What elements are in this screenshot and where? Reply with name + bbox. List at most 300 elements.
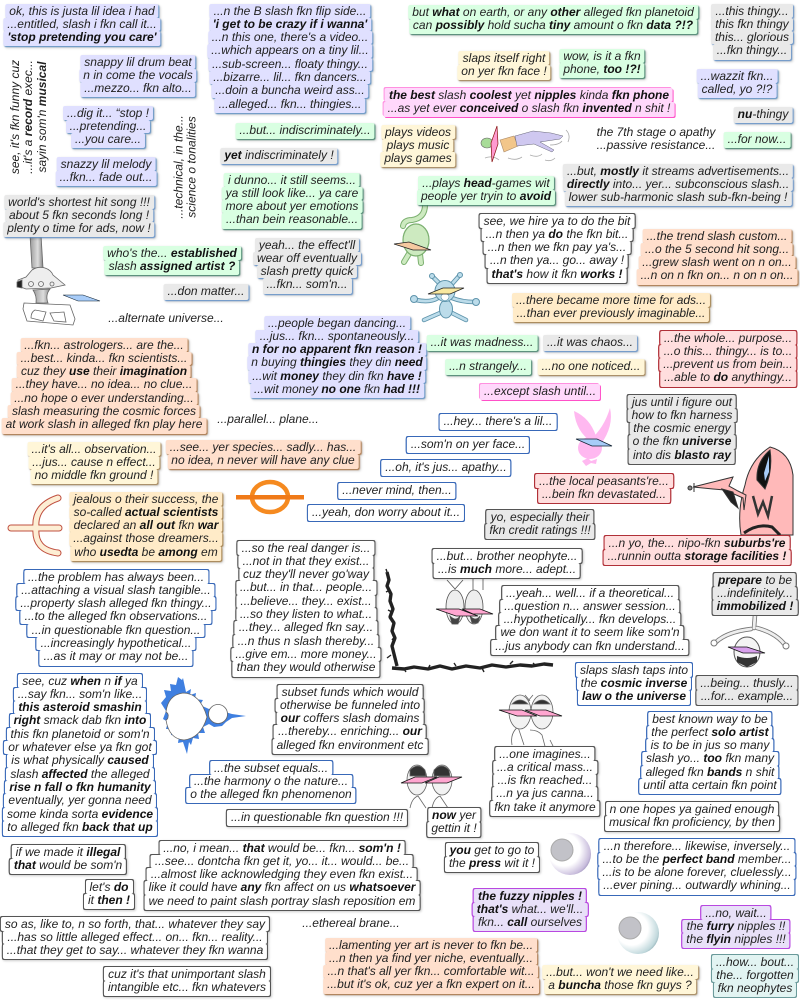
callout: credit ratings: fkn credit ratings !!! bbox=[489, 523, 591, 537]
callout: theoretical: we don want it to seem like som'n bbox=[500, 625, 680, 639]
callout: cosmic inverse law: law o the universe bbox=[582, 689, 686, 703]
rotated text: record exec: ...it's a record exec... bbox=[21, 60, 35, 174]
callout: neophytes: the... forgotten bbox=[716, 968, 794, 982]
callout: subset equals: o the alleged fkn phenomenon bbox=[190, 787, 352, 801]
icon: blue alien bbox=[410, 272, 480, 320]
callout: no i mean: we need to paint slash portray slash reposition em bbox=[149, 894, 415, 908]
callout: i dunno: more about yer emotions bbox=[226, 199, 358, 213]
rotated text: tonalities: science o tonalities bbox=[185, 116, 199, 218]
callout: furry nipples: the flyin nipples !!! bbox=[686, 932, 786, 946]
callout: now yer gettin it bbox=[426, 807, 484, 840]
callout: flip side bbox=[207, 4, 376, 116]
callout: being thusly: ...for... example... bbox=[701, 689, 793, 703]
icon: mandelbrot fractal bbox=[161, 677, 246, 754]
callout: observation: ...it's all... observation... bbox=[31, 442, 157, 456]
callout: hire ya bbox=[480, 214, 634, 283]
callout: whole purpose: ...prevent us from bein... bbox=[663, 357, 793, 371]
callout: best phone: the best slash coolest yet nipples kinda fkn phone bbox=[389, 88, 669, 102]
callout: subset equals bbox=[185, 760, 356, 804]
callout: flip side: ...n this one, there's a video... bbox=[212, 30, 368, 44]
callout: asteroid: ...say fkn... som'n like... bbox=[18, 687, 142, 701]
callout: lamenting bbox=[323, 938, 542, 997]
callout: asteroid: to alleged fkn back that up bbox=[7, 820, 153, 834]
callout: people began dancing: n for no apparent fkn reason ! bbox=[252, 342, 422, 356]
callout: except slash until: ...except slash until... bbox=[484, 384, 596, 398]
callout: asteroid bbox=[2, 673, 158, 837]
callout: flip side: ...which appears on a tiny lil... bbox=[211, 43, 369, 57]
callout: storage facilities: ...n yo, the... nipo-fkn suburbs're bbox=[609, 536, 785, 550]
callout: blasto ray: into dis blasto ray bbox=[633, 448, 731, 462]
callout: effect wear off: wear off eventually bbox=[257, 251, 357, 265]
callout: stop pretending idea: 'stop pretending you care' bbox=[7, 30, 157, 44]
callout: whole purpose: ...able to do anythingy... bbox=[664, 370, 792, 384]
callout: furry nipples: the furry nipples !! bbox=[687, 919, 785, 933]
callout: astrologers: ...no hope o ever understanding... bbox=[14, 391, 194, 405]
callout: i dunno: ya still look like... ya care bbox=[226, 186, 358, 200]
callout: real danger: than they would otherwise bbox=[237, 660, 375, 674]
callout: lets do it: let's do bbox=[90, 880, 128, 894]
callout: trend: ...o the 5 second hit song... bbox=[645, 242, 789, 256]
callout: this thingy: ...this thingy... bbox=[715, 4, 789, 18]
callout: people began dancing: ...jus... fkn... spontaneously... bbox=[260, 329, 414, 343]
callout: yet indiscriminately: yet indiscriminately ! bbox=[224, 148, 334, 162]
callout: furry nipples: ...no, wait... bbox=[705, 906, 767, 920]
callout: assigned artist: slash assigned artist ? bbox=[109, 259, 235, 273]
rotated text: record exec: see, it's fkn funny cuz bbox=[8, 60, 22, 174]
callout: melody bbox=[56, 156, 160, 189]
callout: illegal: if we made it illegal bbox=[16, 844, 120, 858]
icon: pink hooded figure with blaster bbox=[688, 447, 793, 535]
callout: asteroid: right smack dab fkn into bbox=[14, 713, 146, 727]
callout: no i mean bbox=[144, 840, 423, 913]
callout: theoretical: ...yeah... well... if a theoretical... bbox=[506, 586, 674, 600]
callout: nu-thingy: nu-thingy bbox=[738, 106, 788, 120]
icon: green alien bbox=[394, 205, 431, 263]
callout: no one noticed: ...no one noticed... bbox=[542, 358, 640, 372]
callout: advertisements bbox=[563, 164, 793, 206]
callout: stop pretending idea: ok, this is justa lil idea i had bbox=[9, 4, 155, 18]
callout: i dunno: ...than bein reasonable... bbox=[226, 212, 358, 226]
callout: flip side: ...doin a buncha weird ass... bbox=[215, 83, 365, 97]
callout: advertisements: lower sub-harmonic slash sub-fkn-being ! bbox=[569, 190, 787, 204]
callout: dig it bbox=[63, 106, 156, 151]
callout: lamenting: ...lamenting yer art is never to fkn be... bbox=[329, 938, 533, 952]
callout: neophytes bbox=[712, 954, 798, 997]
callout: best phone bbox=[384, 88, 674, 117]
callout: whole purpose: ...o this... thingy... is to... bbox=[664, 344, 792, 358]
callout: more time for ads: ...than ever previously imaginable... bbox=[517, 306, 705, 320]
callout: whole purpose bbox=[659, 330, 797, 387]
callout: asteroid: this fkn planetoid or som'n bbox=[10, 727, 150, 741]
callout: hire ya: ...n then ya do the fkn bit... bbox=[486, 227, 628, 241]
callout: no i mean: like it could have any fkn affect on us whatsoever bbox=[149, 880, 415, 894]
callout: tiny data: but what on earth, or any other alleged fkn planetoid bbox=[412, 4, 694, 18]
callout: assigned artist: who's the... established bbox=[107, 246, 237, 260]
callout: on yer face: ...som'n on yer face... bbox=[411, 436, 525, 450]
callout: don worry: ...yeah, don worry about it... bbox=[312, 504, 460, 518]
callout: shortest hit song: world's shortest hit song !!! bbox=[8, 194, 150, 208]
callout: apathy: ...oh, it's jus... apathy... bbox=[385, 460, 507, 474]
callout: astrologers: ...they have... no idea... no clue... bbox=[16, 377, 192, 391]
label: alternate universe: ...alternate universe... bbox=[108, 311, 224, 325]
callout: being thusly bbox=[696, 676, 798, 705]
callout: blasto ray: o the fkn universe bbox=[633, 434, 731, 448]
callout: one imagines: ...n ya jus canna... bbox=[496, 786, 594, 800]
callout: subset funds: alleged fkn environment etc bbox=[277, 738, 423, 752]
callout: lamenting: ...but it's ok, cuz yer a fkn expert on it... bbox=[327, 977, 535, 991]
callout: this thingy: this fkn thingy bbox=[715, 17, 789, 31]
callout: observation: ...jus... cause n effect... bbox=[32, 455, 156, 469]
callout: head games: ...plays head-games wit bbox=[422, 176, 550, 190]
callout: real danger: ...believe... they... exist... bbox=[240, 594, 372, 608]
callout: whole purpose: ...the whole... purpose... bbox=[664, 330, 792, 344]
callout: neophytes: fkn neophytes bbox=[718, 981, 792, 995]
callout: lamenting: ...n then ya find yer niche, eventually... bbox=[329, 951, 533, 965]
label: 7th stage of apathy: the 7th stage o apathy bbox=[597, 125, 715, 139]
callout: astrologers: cuz they use their imagination bbox=[21, 364, 187, 378]
callout: shortest hit song bbox=[3, 194, 158, 240]
callout: drum beat: snappy lil drum beat bbox=[84, 54, 192, 68]
callout: prepare immobilized: ...indefinitely... bbox=[717, 586, 793, 600]
callout: perfect band: ...n therefore... likewise, inversely... bbox=[604, 838, 790, 852]
callout: wazzit: called, yo ?!? bbox=[702, 82, 772, 96]
callout: yer species bbox=[166, 440, 364, 472]
callout: theoretical: ...hypothetically... fkn develops... bbox=[504, 612, 676, 626]
icon: thorny corner bbox=[386, 569, 553, 672]
callout: drum beat bbox=[79, 54, 200, 100]
callout: prepare immobilized bbox=[713, 572, 797, 615]
callout: cosmic inverse law: slaps slash taps into bbox=[580, 662, 688, 676]
label: 7th stage of apathy: ...passive resistance... bbox=[597, 138, 715, 152]
callout: fuzzy nipples: the fuzzy nipples ! bbox=[478, 888, 582, 902]
callout: advertisements: ...but, mostly it streams advertisements... bbox=[567, 164, 789, 178]
callout: subset equals: ...the harmony o the nature... bbox=[194, 774, 348, 788]
callout: proficiency bbox=[604, 801, 782, 834]
icon: orange ring bbox=[236, 482, 304, 512]
callout: brother neophyte: ...but... brother neophyte... bbox=[437, 548, 577, 562]
callout: jealous scientists: jealous o their success, the bbox=[74, 492, 218, 506]
callout: head games bbox=[417, 176, 555, 205]
callout: one imagines: ...is fkn reached... bbox=[498, 773, 592, 787]
callout: asteroid: see, cuz when n if ya bbox=[22, 674, 138, 688]
callout: wow phone: wow, is it a fkn bbox=[563, 48, 641, 62]
callout: unimportant bbox=[102, 966, 273, 999]
callout: for now: ...for now... bbox=[728, 132, 786, 146]
callout: subset funds: ...thereby... enriching... our bbox=[278, 724, 422, 738]
callout: illegal bbox=[8, 844, 129, 877]
callout: effect wear off: yeah... the effect'll bbox=[259, 238, 355, 252]
callout: astrologers: slash measuring the cosmic forces bbox=[12, 404, 196, 418]
callout: brother neophyte bbox=[433, 548, 581, 578]
callout: more time for ads bbox=[512, 292, 710, 322]
icon: twin aliens with pink visors bbox=[499, 695, 562, 750]
icon: teal eye sphere bbox=[617, 912, 659, 954]
callout: no i mean: ...see... dontcha fkn get it, yo... it... would... be... bbox=[155, 854, 409, 868]
rotated text: tonalities: ...technical, in the... bbox=[172, 115, 186, 219]
callout: madness: ...it was madness... bbox=[431, 334, 533, 348]
callout: asteroid: this asteroid smashin bbox=[18, 700, 142, 714]
callout: drum beat: n in come the vocals bbox=[83, 68, 193, 82]
callout: flip side: 'i get to be crazy if i wanna' bbox=[213, 17, 367, 31]
callout: prepare immobilized: prepare to be bbox=[718, 572, 792, 586]
callout: furry nipples bbox=[681, 905, 790, 949]
callout: theoretical bbox=[491, 586, 689, 655]
callout: theres a lil: ...hey... there's a lil... bbox=[444, 414, 552, 428]
callout: the problem: ...as it may or may not be... bbox=[44, 649, 188, 663]
callout: cosmic inverse law bbox=[576, 662, 692, 705]
callout: lamenting: ...n that's all yer fkn... comfortable wit... bbox=[327, 964, 535, 978]
callout: credit ratings: yo, especially their bbox=[491, 510, 589, 524]
callout: dig it: ...pretending... bbox=[70, 119, 146, 133]
rotated text: tonalities bbox=[172, 115, 199, 219]
callout: people began dancing: ...wit money no one fkn had !!! bbox=[254, 382, 420, 396]
callout: lets do it bbox=[82, 879, 137, 912]
callout: yer species: no idea, n never will have any clue bbox=[171, 453, 355, 467]
callout: the problem: ...to the alleged fkn observations... bbox=[25, 609, 207, 623]
callout: wazzit bbox=[697, 68, 777, 98]
callout: real danger: cuz they'll never go'way bbox=[243, 567, 369, 581]
callout: the problem: ...the problem has always been... bbox=[28, 570, 204, 584]
callout: neophytes: ...how... bout... bbox=[716, 954, 794, 968]
callout: theoretical: ...jus anybody can fkn understand... bbox=[495, 639, 685, 653]
callout: unimportant: intangible etc... fkn whatevers bbox=[108, 980, 266, 994]
callout: no i mean: ...almost like acknowledging they even fkn exist... bbox=[151, 867, 413, 881]
callout: hire ya: that's how it fkn works ! bbox=[492, 267, 622, 281]
icon: stone mushroom figure bbox=[17, 235, 75, 325]
callout: press: the press wit it ! bbox=[449, 856, 535, 870]
icon: pink bunny bbox=[574, 408, 612, 466]
callout: solo artist: slash yo... too fkn many bbox=[646, 751, 774, 765]
callout: flip side: ...sub-screen... floaty thingy... bbox=[212, 57, 368, 71]
callout: storage facilities bbox=[604, 536, 790, 565]
callout: theoretical: ...question n... answer session... bbox=[504, 599, 676, 613]
callout: blasto ray: how to fkn harness bbox=[632, 408, 732, 422]
label: 7th stage of apathy bbox=[597, 126, 715, 153]
callout: prepare immobilized: immobilized ! bbox=[717, 599, 793, 613]
callout: flip side: ...bizarre... lil... fkn dancers... bbox=[213, 70, 367, 84]
callout: effect wear off: slash pretty quick bbox=[261, 264, 353, 278]
callout: more time for ads: ...there became more time for ads... bbox=[516, 292, 706, 306]
callout: wazzit: ...wazzit fkn... bbox=[701, 68, 773, 82]
callout: jealous scientists: who usedta be among em bbox=[74, 545, 218, 559]
icon: arms-crossed aliens with pink visors bbox=[401, 765, 462, 808]
callout: flip side: ...alleged... fkn... thingies... bbox=[219, 97, 361, 111]
callout: flip side: ...n the B slash fkn flip side... bbox=[214, 4, 366, 18]
callout: buncha: a buncha those fkn guys ? bbox=[548, 978, 692, 992]
callout: jealous scientists: declared an all out fkn war bbox=[74, 518, 218, 532]
callout: subset equals: ...the subset equals... bbox=[214, 760, 328, 774]
callout: tiny data: can possibly hold sucha tiny amount o fkn data ?!? bbox=[413, 18, 693, 32]
callout: people began dancing: ...wit money they din fkn have ! bbox=[252, 369, 422, 383]
callout: asteroid: rise n fall o fkn humanity bbox=[9, 780, 151, 794]
callout: real danger: ...not in that they exist... bbox=[243, 554, 369, 568]
label: parallel plane: ...parallel... plane... bbox=[217, 412, 319, 426]
callout: jealous scientists: ...against those dreamers... bbox=[73, 531, 219, 545]
callout: lets do it: it then ! bbox=[88, 893, 130, 907]
callout: the problem bbox=[15, 569, 216, 667]
callout: trend: ...grew slash went on n on... bbox=[642, 255, 792, 269]
callout: people began dancing: n buying thingies they din need bbox=[251, 355, 423, 369]
callout: now yer gettin it: gettin it ! bbox=[431, 821, 477, 835]
callout: i dunno: i dunno... it still seems... bbox=[228, 172, 356, 186]
callout: buncha: ...but... won't we need like... bbox=[546, 964, 694, 978]
callout: dig it: ...you care... bbox=[75, 132, 141, 146]
callout: so as like to: ...has so little alleged effect... on... fkn... reality... bbox=[7, 930, 263, 944]
callout: one imagines bbox=[489, 746, 602, 819]
callout: trend bbox=[637, 228, 797, 285]
callout: trend: ...the trend slash custom... bbox=[647, 228, 787, 242]
icon: psi glyph bbox=[11, 498, 59, 553]
callout: one imagines: ...one imagines... bbox=[499, 746, 591, 760]
callout: press bbox=[444, 842, 542, 875]
callout: real danger: ...they... alleged fkn say... bbox=[239, 620, 373, 634]
callout: real danger: ...so the real danger is... bbox=[242, 540, 370, 554]
callout: perfect band bbox=[597, 838, 796, 896]
callout: blasto ray bbox=[628, 394, 736, 464]
callout: press: you get to go to bbox=[450, 842, 534, 856]
callout: one imagines: ...a critical mass... bbox=[497, 760, 593, 774]
label: ethereal brane: ...ethereal brane... bbox=[302, 916, 400, 930]
callout: solo artist: until atta certain fkn point bbox=[643, 778, 777, 792]
rotated text: record exec bbox=[8, 60, 49, 174]
callout: trend: ...n on n fkn on... n on n on... bbox=[641, 268, 793, 282]
callout: effect wear off: ...fkn... som'n... bbox=[266, 277, 347, 291]
callout: strangely: ...n strangely... bbox=[449, 358, 527, 372]
callout: tiny data bbox=[408, 4, 698, 34]
callout: this thingy bbox=[711, 4, 793, 60]
callout: one imagines: fkn take it anymore bbox=[494, 800, 596, 814]
callout: astrologers bbox=[2, 338, 210, 437]
callout: head games: people yer tryin to avoid bbox=[421, 189, 551, 203]
callout: so as like to: so as, like to, n so forth, that... whatever they say bbox=[5, 916, 265, 930]
callout: slaps itself: on yer fkn face ! bbox=[461, 64, 547, 78]
callout: hire ya: ...n then ya... go... away ! bbox=[490, 253, 624, 267]
callout: fuzzy nipples: that's what... we'll... bbox=[477, 902, 583, 916]
callout: chaos: ...it was chaos... bbox=[547, 334, 633, 348]
icon: hanging figure bbox=[711, 615, 789, 667]
callout: plays videos: plays videos bbox=[385, 124, 451, 138]
callout: proficiency: musical fkn proficiency, by then bbox=[609, 815, 775, 829]
callout: this thingy: ...fkn thingy... bbox=[717, 43, 787, 57]
callout: observation bbox=[28, 442, 164, 487]
callout: local peasants: ...bein fkn devastated... bbox=[542, 487, 666, 501]
callout: illegal: that would be som'n bbox=[14, 858, 122, 872]
callout: slaps itself: slaps itself right bbox=[463, 50, 545, 64]
callout: best phone: ...as yet ever conceived o slash fkn invented n shit ! bbox=[388, 101, 670, 115]
callout: real danger: ...give em... more money... bbox=[235, 647, 377, 661]
callout: asteroid: is what physically caused bbox=[11, 753, 149, 767]
callout: in questionable question: ...in questionable fkn question !!! bbox=[231, 810, 403, 824]
callout: i dunno bbox=[222, 172, 366, 232]
callout: jealous scientists: so-called actual scientists bbox=[74, 505, 218, 519]
callout: fuzzy nipples bbox=[472, 888, 589, 932]
callout: astrologers: ...best... kinda... fkn scientists... bbox=[21, 351, 187, 365]
callout: shortest hit song: about 5 fkn seconds long ! bbox=[9, 208, 149, 222]
callout: solo artist: the perfect solo artist bbox=[651, 725, 769, 739]
callout: jealous scientists bbox=[69, 492, 226, 564]
callout: unimportant: cuz it's that unimportant slash bbox=[108, 966, 266, 980]
callout: being thusly: ...being... thusly... bbox=[700, 676, 794, 690]
callout: melody: snazzy lil melody bbox=[61, 156, 151, 170]
callout: real danger: ...so they listen to what... bbox=[240, 607, 372, 621]
callout: the problem: ...in questionable fkn question... bbox=[32, 623, 200, 637]
callout: the problem: ...property slash alleged fkn thingy... bbox=[20, 596, 212, 610]
callout: the problem: ...attaching a visual slash tangible... bbox=[21, 583, 211, 597]
callout: dig it: ...dig it... “stop ! bbox=[67, 106, 149, 120]
callout: subset funds bbox=[272, 684, 431, 757]
callout: real danger: ...n thus n slash thereby... bbox=[238, 634, 374, 648]
callout: hire ya: see, we hire ya to do the bit bbox=[484, 214, 630, 228]
callout: don matter: ...don matter... bbox=[168, 284, 244, 298]
callout: asteroid: eventually, yer gonna need bbox=[8, 793, 152, 807]
callout: people began dancing bbox=[247, 316, 430, 401]
callout: the problem: ...increasingly hypothetical... bbox=[41, 636, 191, 650]
callout: subset funds: our coffers slash domains bbox=[281, 711, 419, 725]
icon: upside-down aliens bbox=[436, 578, 493, 624]
callout: proficiency: n one hopes ya gained enough bbox=[610, 802, 774, 816]
callout: assigned artist bbox=[103, 246, 244, 278]
callout: perfect band: ...ever pining... outwardly whining... bbox=[603, 878, 791, 892]
callout: real danger bbox=[230, 540, 384, 680]
callout: so as like to bbox=[0, 916, 272, 962]
callout: plays videos bbox=[380, 124, 456, 167]
callout: credit ratings bbox=[485, 510, 595, 539]
callout: never mind: ...never mind, then... bbox=[342, 482, 452, 496]
callout: people began dancing: ...people began dancing... bbox=[268, 316, 406, 330]
callout: local peasants: ...the local peasants're... bbox=[539, 474, 669, 488]
icon: lying figure bbox=[481, 126, 569, 162]
callout: observation: no middle fkn ground ! bbox=[35, 468, 153, 482]
callout: no i mean: ...no, i mean... that would be... fkn... som'n ! bbox=[163, 840, 401, 854]
callout: fuzzy nipples: fkn... call ourselves bbox=[478, 915, 582, 929]
callout: so as like to: ...that they get to say... whatever they fkn wanna bbox=[7, 943, 263, 957]
callout: solo artist: best known way to be bbox=[652, 712, 768, 726]
callout: wow phone: phone, too !?! bbox=[563, 62, 641, 76]
callout: yer species: ...see... yer species... sadly... has... bbox=[170, 440, 356, 454]
callout: asteroid: slash affected the alleged bbox=[10, 767, 150, 781]
callout: local peasants bbox=[535, 474, 673, 503]
callout: cosmic inverse law: the cosmic inverse bbox=[581, 676, 687, 690]
rotated text: record exec: sayin som'n musical bbox=[35, 61, 49, 173]
callout: stop pretending idea: ...entitled, slash i fkn call it... bbox=[7, 17, 157, 31]
callout: perfect band: ...is to be alone forever, cluelessly... bbox=[602, 865, 792, 879]
callout: subset funds: subset funds which would bbox=[282, 684, 418, 698]
callout: real danger: ...but... in that... people... bbox=[240, 580, 372, 594]
callout: asteroid: or whatever else ya fkn got bbox=[8, 740, 152, 754]
icon: blue parallelogram bbox=[63, 295, 100, 301]
callout: indiscriminately: ...but... indiscriminately... bbox=[239, 122, 371, 136]
callout: melody: ...fkn... fade out... bbox=[60, 170, 152, 184]
callout: stop pretending idea bbox=[3, 4, 164, 49]
callout: brother neophyte: ...is much more... adept... bbox=[438, 562, 576, 576]
callout: buncha bbox=[542, 964, 702, 997]
callout: slaps itself bbox=[457, 50, 551, 80]
callout: wow phone bbox=[559, 48, 645, 78]
callout: solo artist: is to be in jus so many bbox=[651, 738, 769, 752]
icon: purple eye sphere bbox=[549, 833, 591, 875]
callout: this thingy: this... glorious bbox=[715, 30, 789, 44]
callout: asteroid: some kinda sorta evidence bbox=[7, 807, 153, 821]
callout: astrologers: at work slash in alleged fkn play here bbox=[6, 417, 202, 431]
callout: hire ya: ...n then we fkn pay ya's... bbox=[488, 240, 626, 254]
callout: plays videos: plays games bbox=[384, 151, 452, 165]
callout: astrologers: ...fkn... astrologers... are the... bbox=[24, 338, 184, 352]
callout: storage facilities: ...runnin outta storage facilities ! bbox=[608, 549, 786, 563]
callout: now yer gettin it: now yer bbox=[432, 808, 476, 822]
callout: subset funds: otherwise be funneled into bbox=[280, 698, 420, 712]
callout: shortest hit song: plenty o time for ads, now ! bbox=[7, 221, 151, 235]
callout: perfect band: ...to be the perfect band member... bbox=[603, 852, 791, 866]
